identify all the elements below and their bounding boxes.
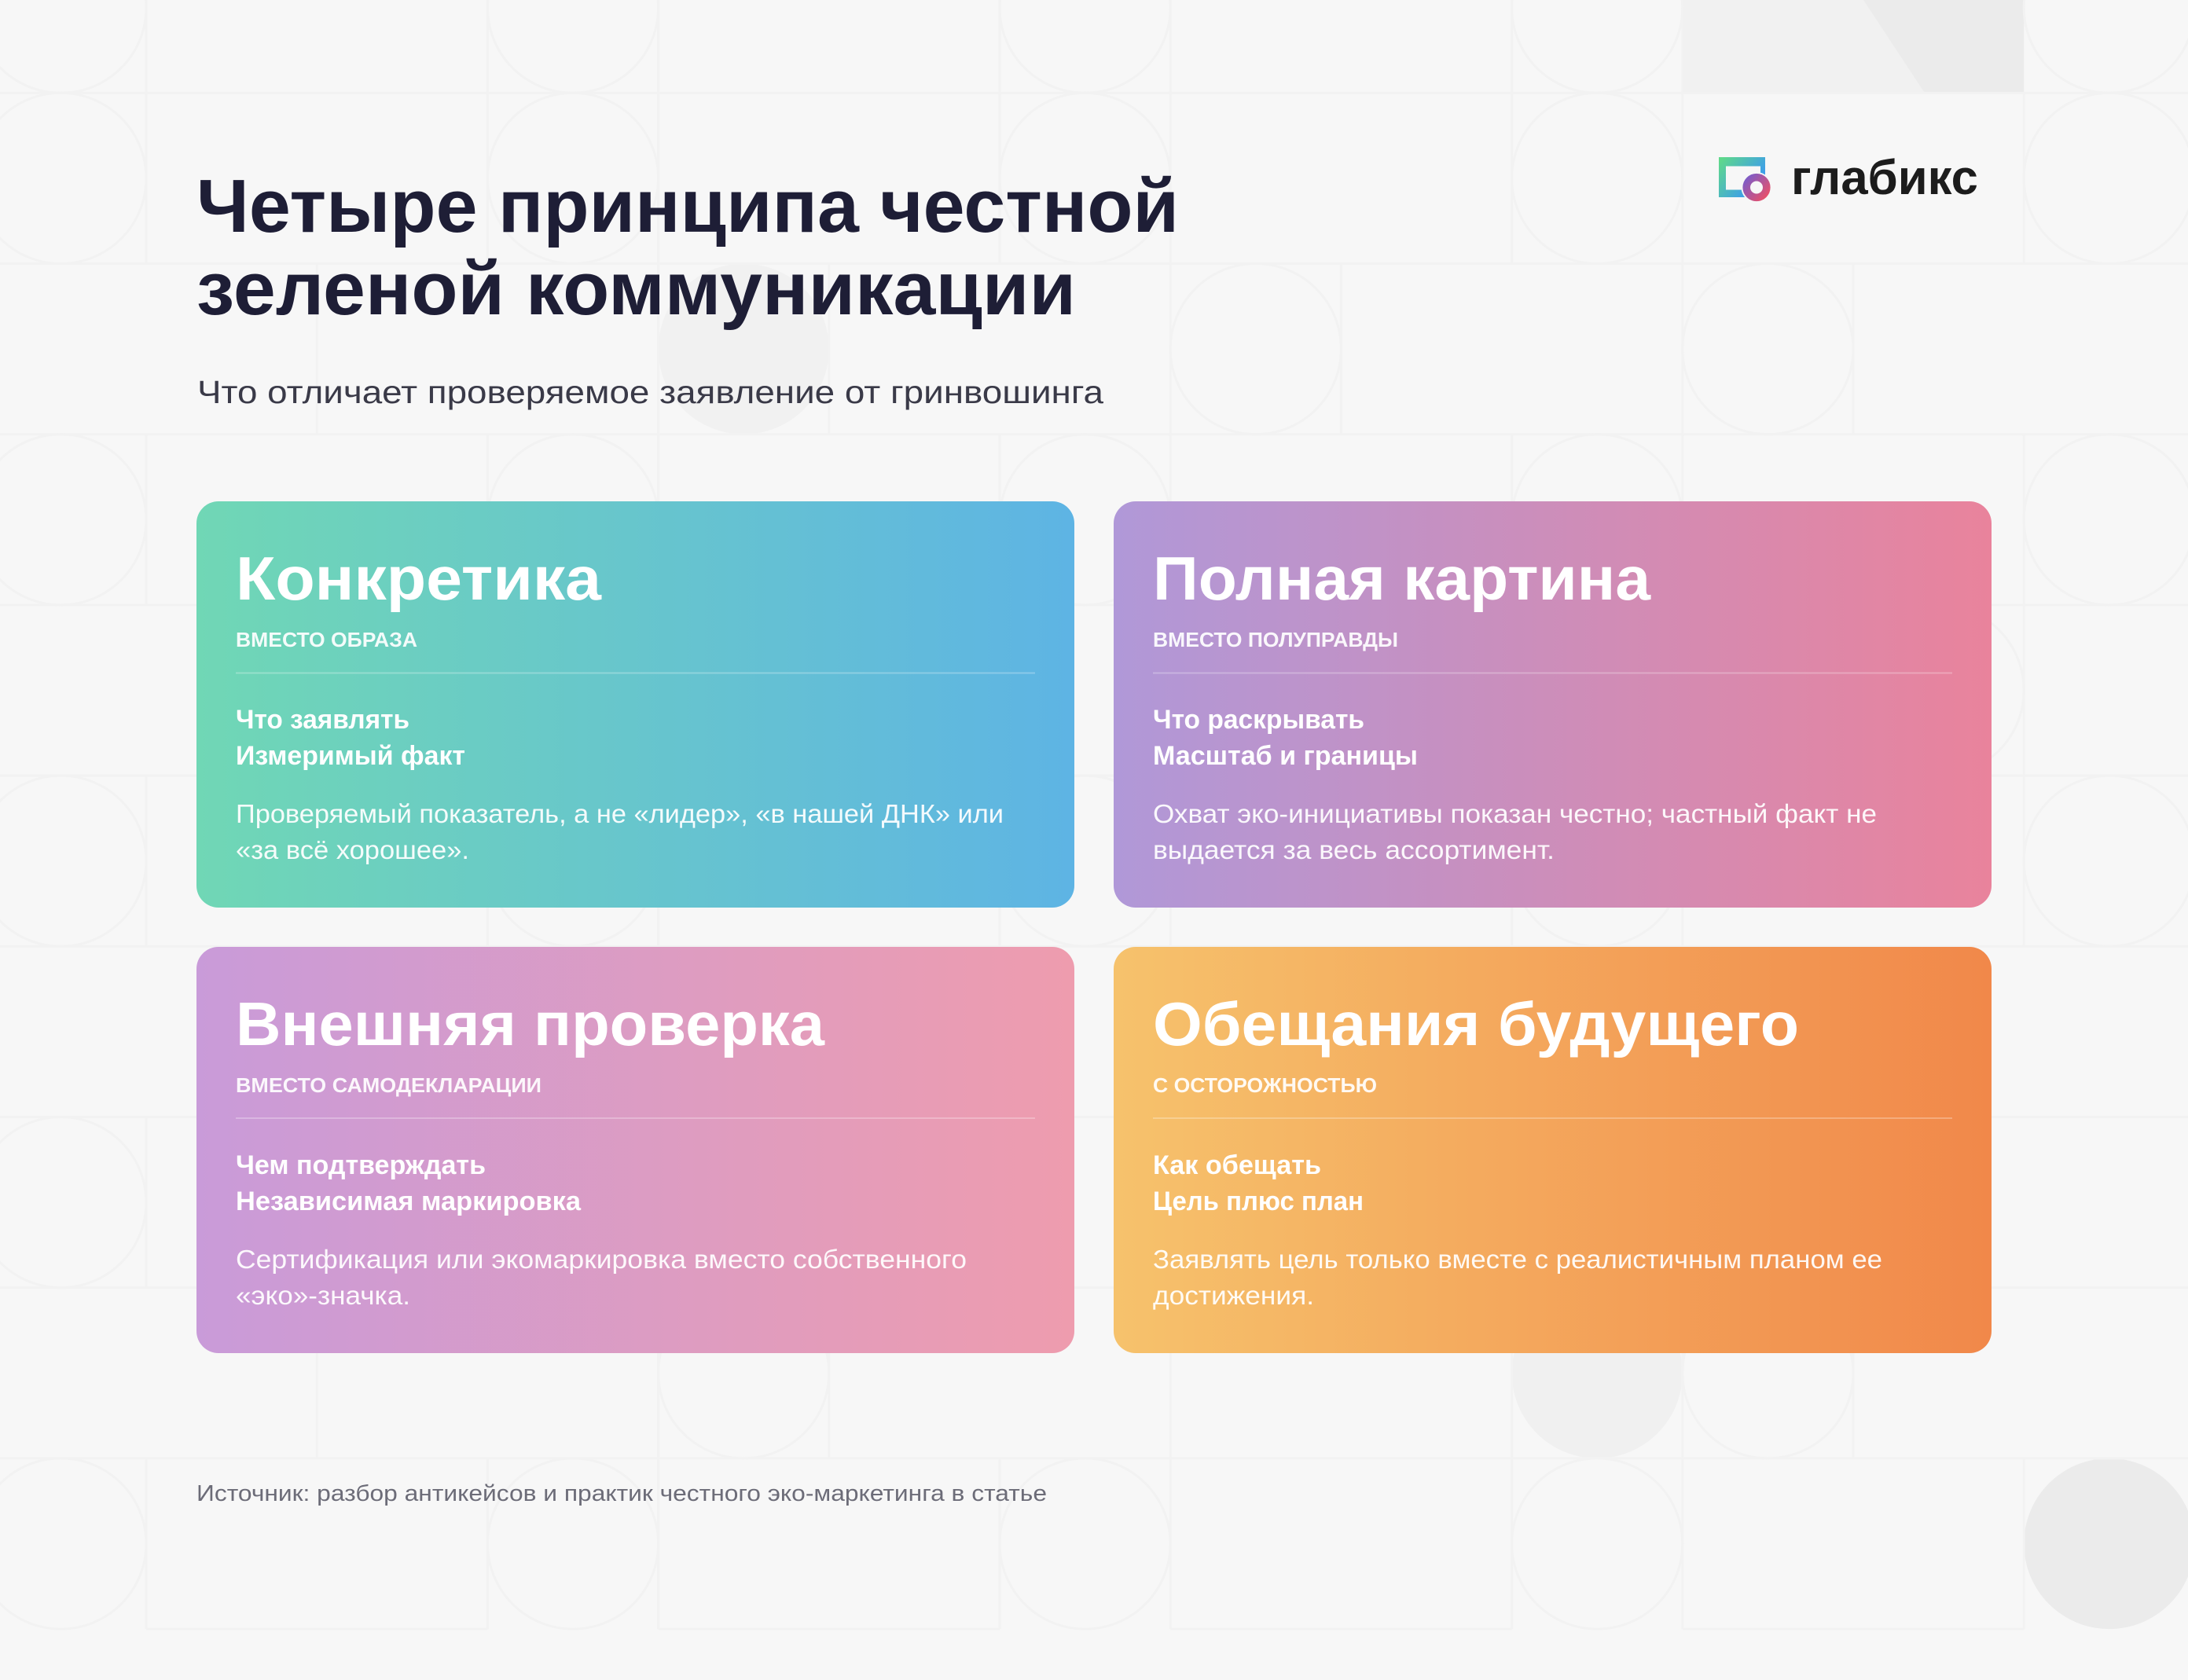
- card body text: выдается за весь ассортимент.: [1153, 835, 1555, 864]
- card key point: Как обещать: [1153, 1150, 1321, 1180]
- card body text: Сертификация или экомаркировка вместо собственного: [236, 1245, 967, 1274]
- logo: глабикс: [1719, 151, 1978, 205]
- logo wordmark: глабикс: [1791, 151, 1978, 205]
- card label: ВМЕСТО ПОЛУПРАВДЫ: [1153, 628, 1398, 651]
- card body text: [1153, 799, 1877, 864]
- card key point: Цель плюс план: [1153, 1187, 1364, 1216]
- card body text: Охват эко-инициативы показан честно; частный факт не: [1153, 799, 1877, 828]
- card heading: Полная картина: [1153, 544, 1651, 613]
- card key point: Измеримый факт: [236, 741, 465, 771]
- card label: С ОСТОРОЖНОСТЬЮ: [1153, 1073, 1377, 1097]
- card background: [196, 947, 1074, 1353]
- card background: [196, 501, 1074, 908]
- card key point: Масштаб и границы: [1153, 741, 1418, 771]
- panel: Конкретика: [196, 501, 1074, 908]
- title: Четыре принципа честной: [196, 164, 1179, 248]
- card body text: [236, 1245, 967, 1310]
- card body text: [236, 799, 1004, 864]
- card key point: [1153, 705, 1418, 771]
- source footnote: Источник: разбор антикейсов и практик честного эко-маркетинга в статье: [196, 1481, 1047, 1506]
- card label: ВМЕСТО САМОДЕКЛАРАЦИИ: [236, 1073, 541, 1097]
- card body text: достижения.: [1153, 1281, 1314, 1310]
- card label: ВМЕСТО ОБРАЗА: [236, 628, 417, 651]
- card body text: «эко»-значка.: [236, 1281, 410, 1310]
- card body text: «за всё хорошее».: [236, 835, 469, 864]
- card body text: [1153, 1245, 1882, 1310]
- card key point: Что раскрывать: [1153, 705, 1364, 735]
- icon: logo mark: [1719, 157, 1771, 203]
- card key point: [236, 1150, 582, 1216]
- panel: Внешняя проверка: [196, 947, 1074, 1353]
- title: [196, 164, 1179, 331]
- card key point: [236, 705, 465, 771]
- card heading: Конкретика: [236, 544, 602, 613]
- title: зеленой коммуникации: [196, 247, 1076, 331]
- card key point: [1153, 1150, 1364, 1216]
- card heading: Обещания будущего: [1153, 989, 1799, 1058]
- panel: Обещания будущего: [1114, 947, 1992, 1353]
- panel: Полная картина: [1114, 501, 1992, 908]
- subtitle: Что отличает проверяемое заявление от гринвошинга: [197, 374, 1103, 410]
- card key point: Независимая маркировка: [236, 1187, 582, 1216]
- card heading: Внешняя проверка: [236, 989, 825, 1058]
- card background: [1114, 501, 1992, 908]
- card body text: Заявлять цель только вместе с реалистичным планом ее: [1153, 1245, 1882, 1274]
- card key point: Что заявлять: [236, 705, 409, 735]
- card body text: Проверяемый показатель, а не «лидер», «в нашей ДНК» или: [236, 799, 1004, 828]
- card key point: Чем подтверждать: [236, 1150, 486, 1180]
- card background: [1114, 947, 1992, 1353]
